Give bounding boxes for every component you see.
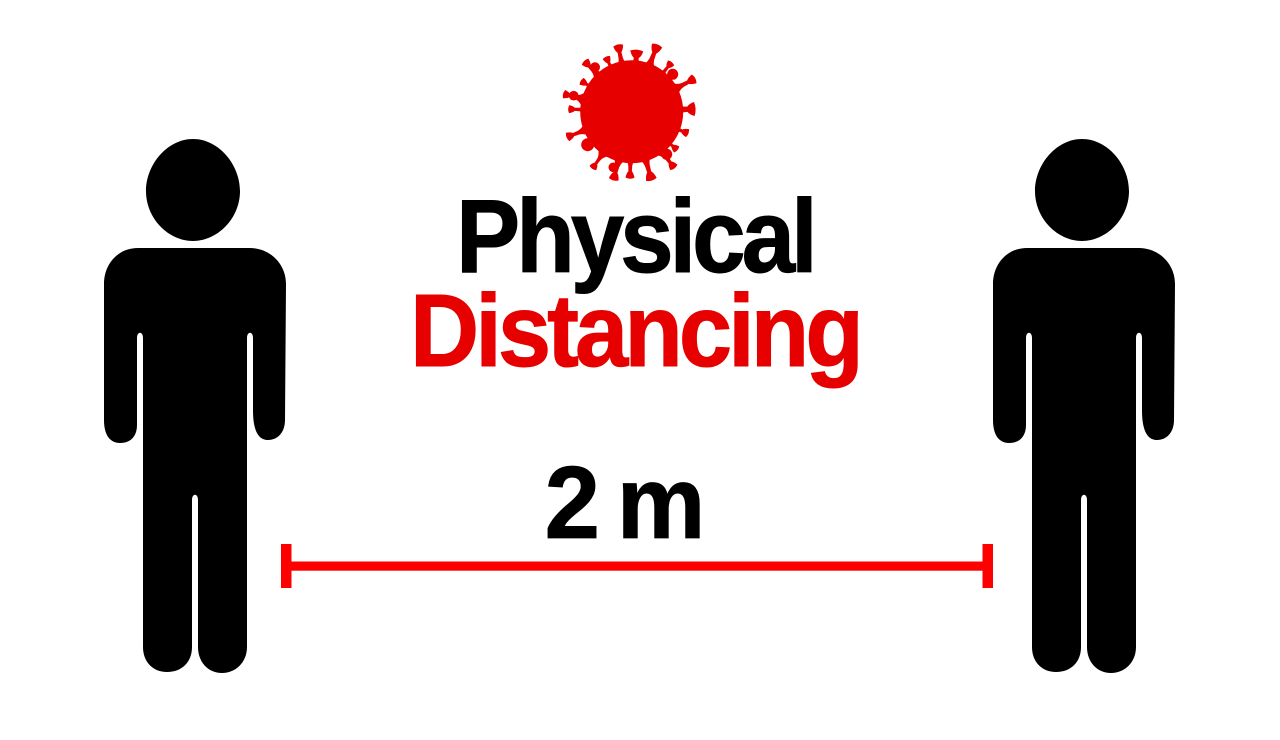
title: Distancing: Distancing — [410, 274, 864, 389]
distance arrow: red measuring bar — [281, 544, 993, 588]
icon: red coronavirus — [561, 41, 699, 183]
distance label: 2 m: 2 m — [544, 445, 706, 560]
person: left figure — [104, 139, 286, 673]
person: right figure — [993, 139, 1175, 673]
title: Physical: Physical — [456, 180, 818, 295]
